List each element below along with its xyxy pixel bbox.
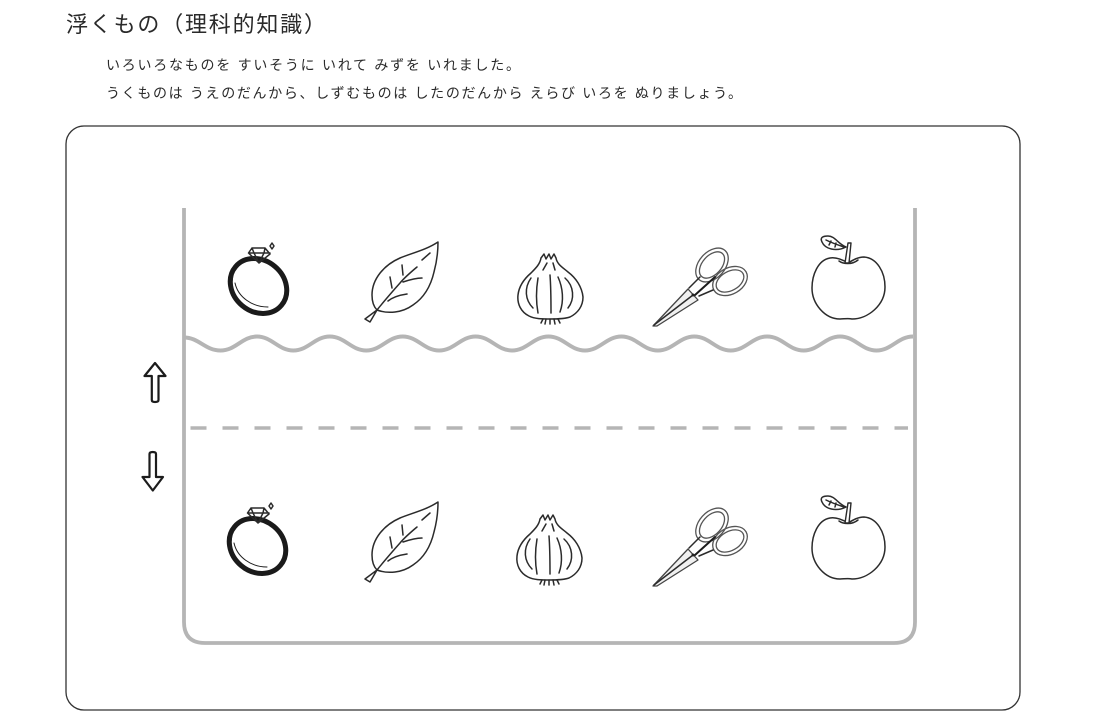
icon: leaf, lower — [365, 502, 438, 582]
panel: outer frame — [66, 126, 1020, 710]
instruction line 2: うくものは うえのだんから、しずむものは したのだんから えらび いろを ぬりましょう。 — [106, 85, 742, 101]
instruction line 1: いろいろなものを すいそうに いれて みずを いれました。 — [106, 57, 520, 73]
icon: leaf, upper — [365, 242, 438, 322]
instructions — [106, 57, 742, 101]
icon: scissors, upper — [653, 242, 753, 326]
water tank — [184, 208, 915, 643]
dashed divider — [190, 426, 908, 430]
water surface wave — [184, 336, 913, 350]
icon: onion, lower — [517, 515, 582, 585]
icon: scissors, lower — [653, 502, 753, 586]
arrow: down — [142, 452, 163, 490]
title: 浮くもの（理科的知識） — [66, 12, 326, 37]
icon: apple, upper — [812, 236, 885, 319]
arrow: up — [144, 363, 166, 402]
icon: onion, upper — [518, 254, 583, 324]
icon: ring, lower — [218, 503, 297, 585]
icon: ring, upper — [219, 243, 298, 325]
icon: apple, lower — [812, 496, 885, 579]
